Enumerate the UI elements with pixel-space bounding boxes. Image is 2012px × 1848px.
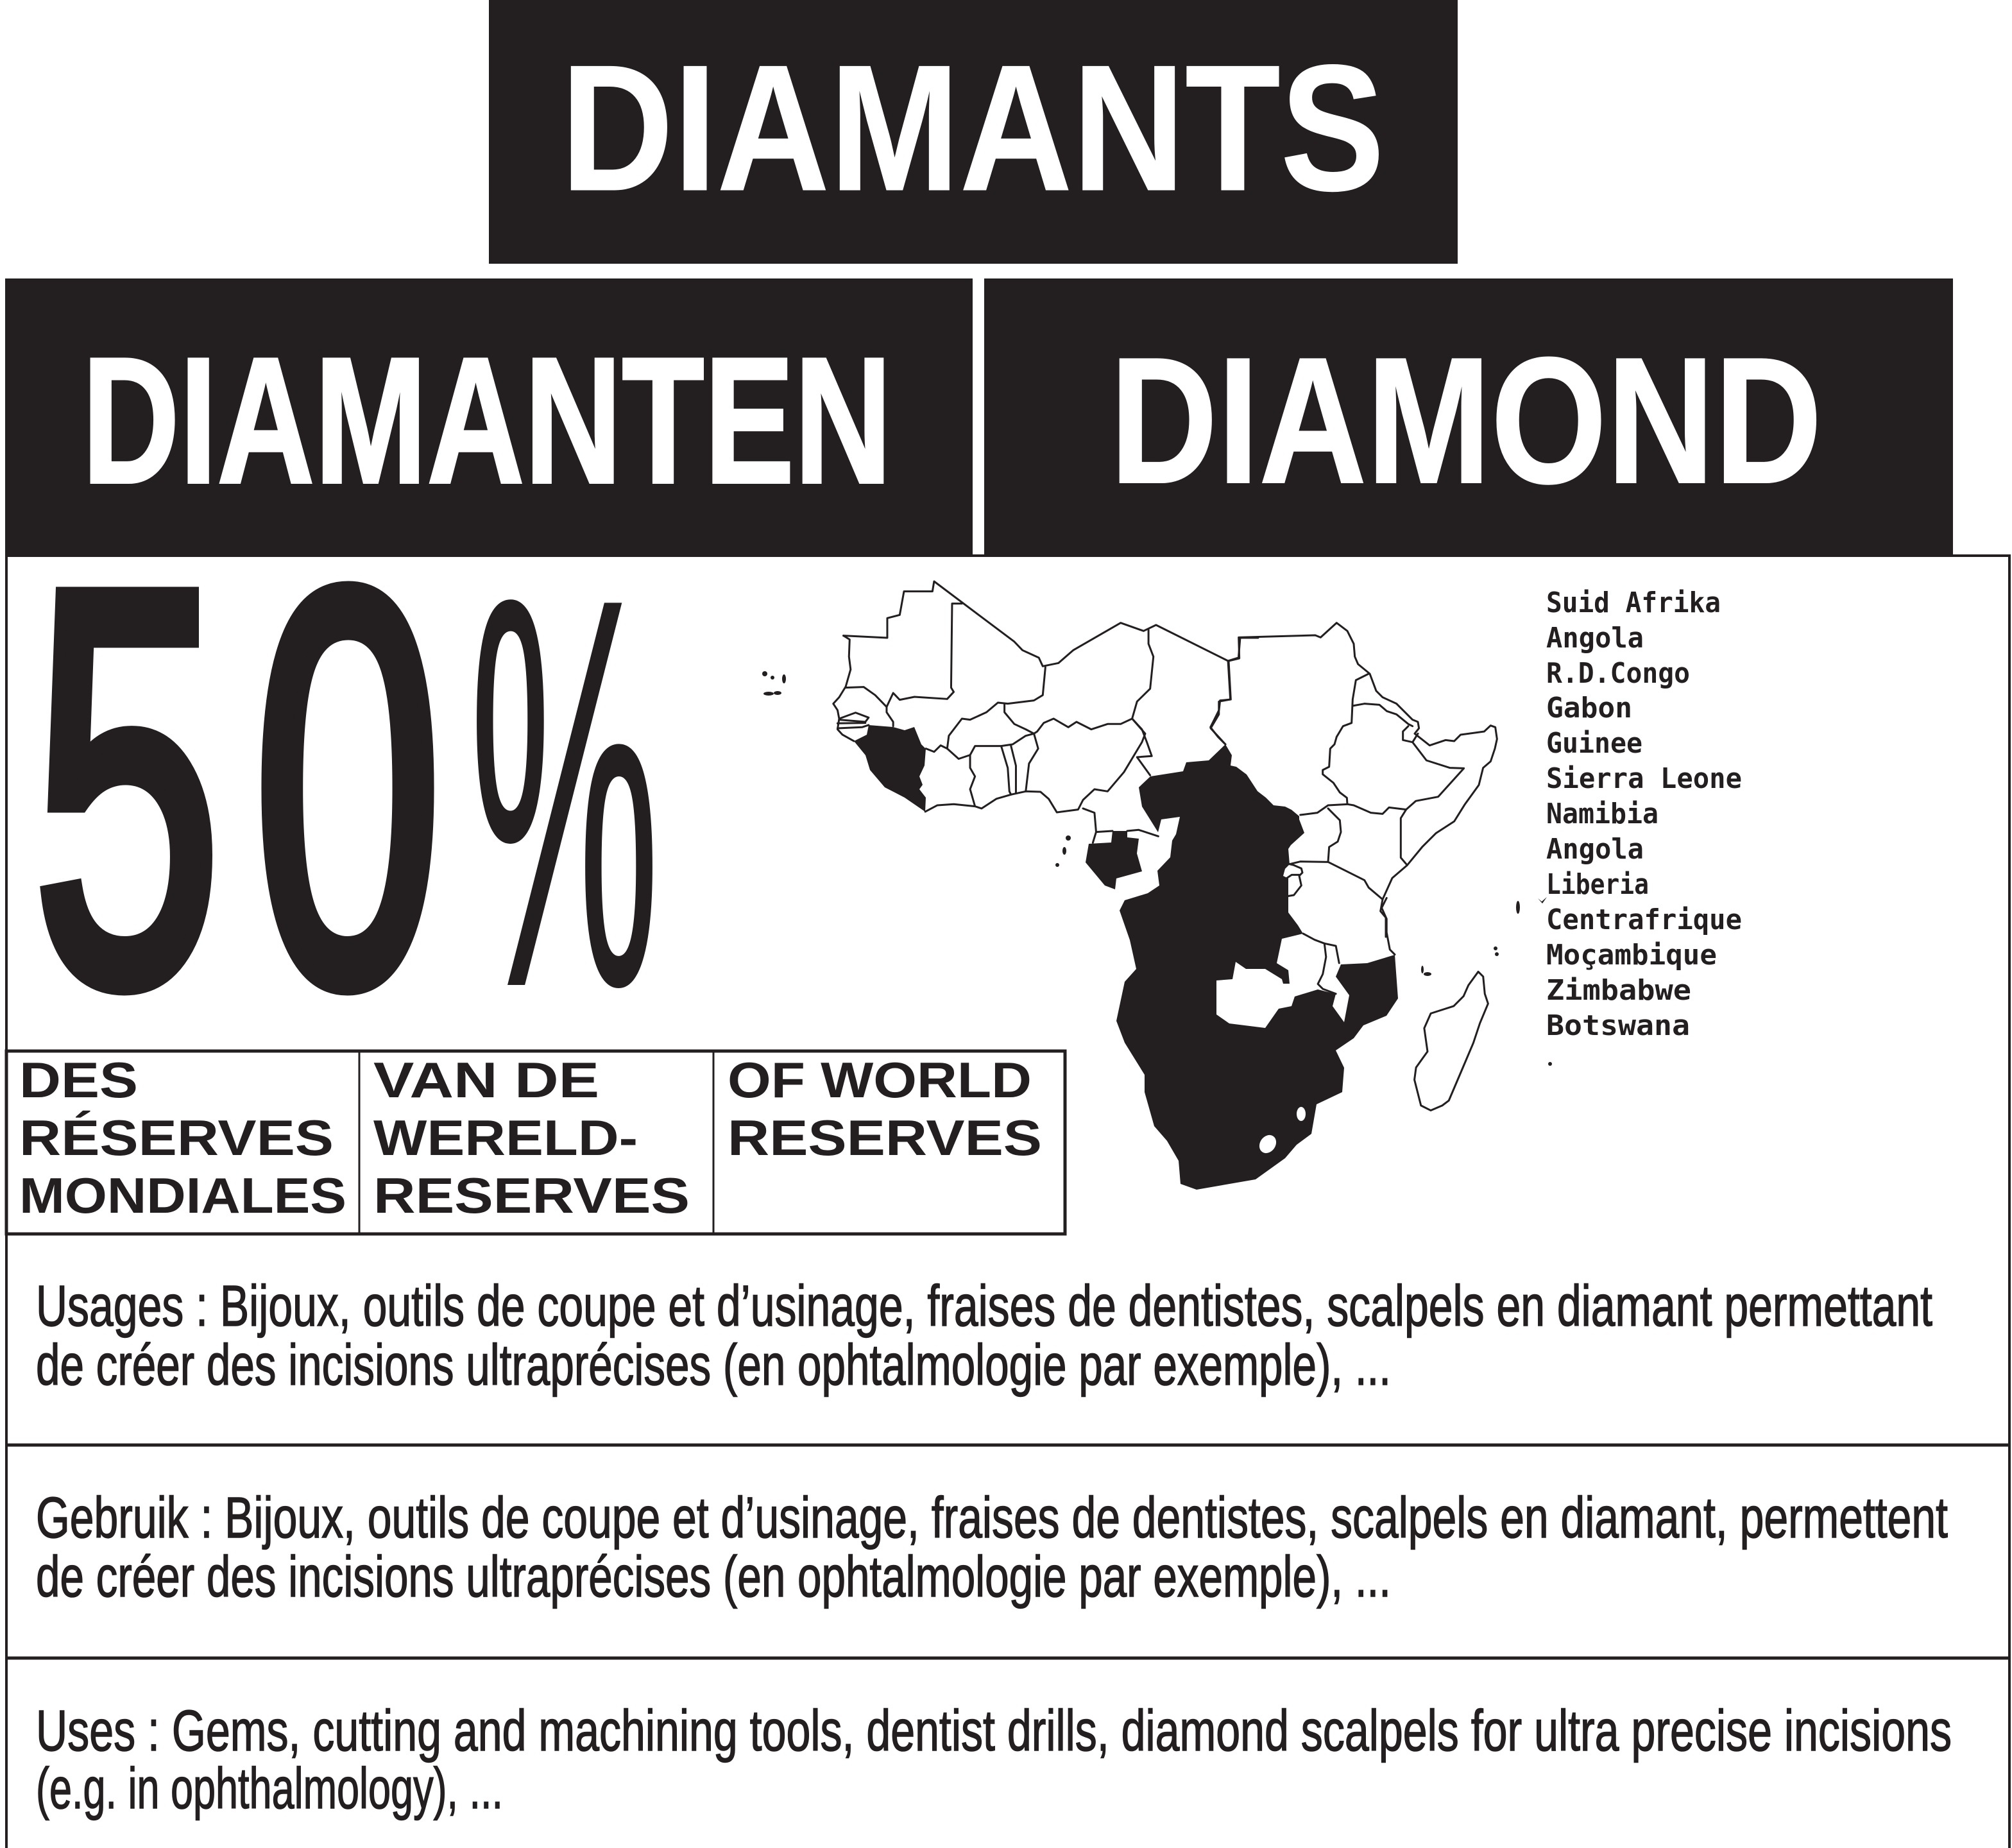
text: %	[470, 484, 660, 1101]
country list: Gabon	[1546, 692, 1632, 724]
title: English: DIAMOND	[1110, 321, 1822, 521]
producing countries: Central and Southern Africa	[1116, 744, 1398, 1190]
title: French: DIAMANTS	[561, 28, 1385, 228]
usage text: French	[36, 1274, 1932, 1398]
country list	[1546, 586, 1742, 1042]
map of Africa	[762, 581, 1552, 1190]
producing countries: Guinea, Sierra Leone, Liberia	[854, 725, 926, 812]
big statistic: 50%: 5	[33, 475, 221, 1099]
title: Dutch: DIAMANTEN	[82, 321, 892, 521]
country list: Zimbabwe	[1546, 974, 1691, 1007]
title: French	[489, 0, 1458, 264]
country list: Liberia	[1546, 868, 1649, 901]
country list: Botswana	[1546, 1009, 1690, 1042]
Dutch column	[373, 1052, 690, 1224]
big statistic: 50%	[33, 475, 660, 1101]
West Africa borders	[833, 581, 1258, 843]
Lesotho and Swaziland holes	[1256, 1107, 1306, 1156]
country list: Guinee	[1546, 727, 1642, 760]
content frame	[6, 556, 2009, 1848]
title: Dutch	[5, 278, 973, 556]
country list: Namibia	[1546, 798, 1658, 830]
country list: Centrafrique	[1546, 903, 1742, 936]
French column: DES	[19, 1052, 138, 1108]
country list: Moçambique	[1546, 939, 1717, 971]
Dutch column: RESERVES	[373, 1167, 690, 1224]
big statistic: 50%: 0	[254, 475, 441, 1099]
title: English	[984, 278, 1953, 556]
French column	[19, 1052, 346, 1224]
country list: Sierra Leone	[1546, 762, 1742, 795]
East Africa borders	[1211, 623, 1497, 937]
Southern Africa borders and Madagascar	[1303, 898, 1488, 1111]
divider	[6, 1657, 2009, 1659]
Dutch column: VAN DE	[373, 1052, 599, 1108]
reserves table	[6, 1051, 1065, 1234]
usage text: Dutch: de créer des incisions ultraprécises (en ophtalmologie par exemple), ...	[36, 1545, 1391, 1609]
country list: Suid Afrika	[1546, 586, 1721, 619]
English column: OF WORLD	[728, 1052, 1032, 1108]
usage text: French: de créer des incisions ultraprécises (en ophtalmologie par exemple), ...	[36, 1333, 1391, 1398]
usage text: English	[36, 1699, 1952, 1821]
country list: Angola	[1546, 622, 1644, 654]
usage text: English: (e.g. in ophthalmology), ...	[36, 1757, 503, 1821]
usage text: Dutch	[36, 1486, 1948, 1609]
country list: Angola	[1546, 833, 1644, 866]
producing country: Gabon	[1086, 831, 1142, 889]
small islands	[762, 671, 1552, 1066]
French column: RÉSERVES	[19, 1109, 334, 1166]
divider	[6, 1444, 2009, 1446]
English column: RESERVES	[728, 1109, 1042, 1166]
country list: R.D.Congo	[1546, 657, 1690, 690]
Dutch column: WERELD-	[373, 1109, 638, 1166]
French column: MONDIALES	[19, 1167, 346, 1224]
English column	[728, 1052, 1042, 1166]
